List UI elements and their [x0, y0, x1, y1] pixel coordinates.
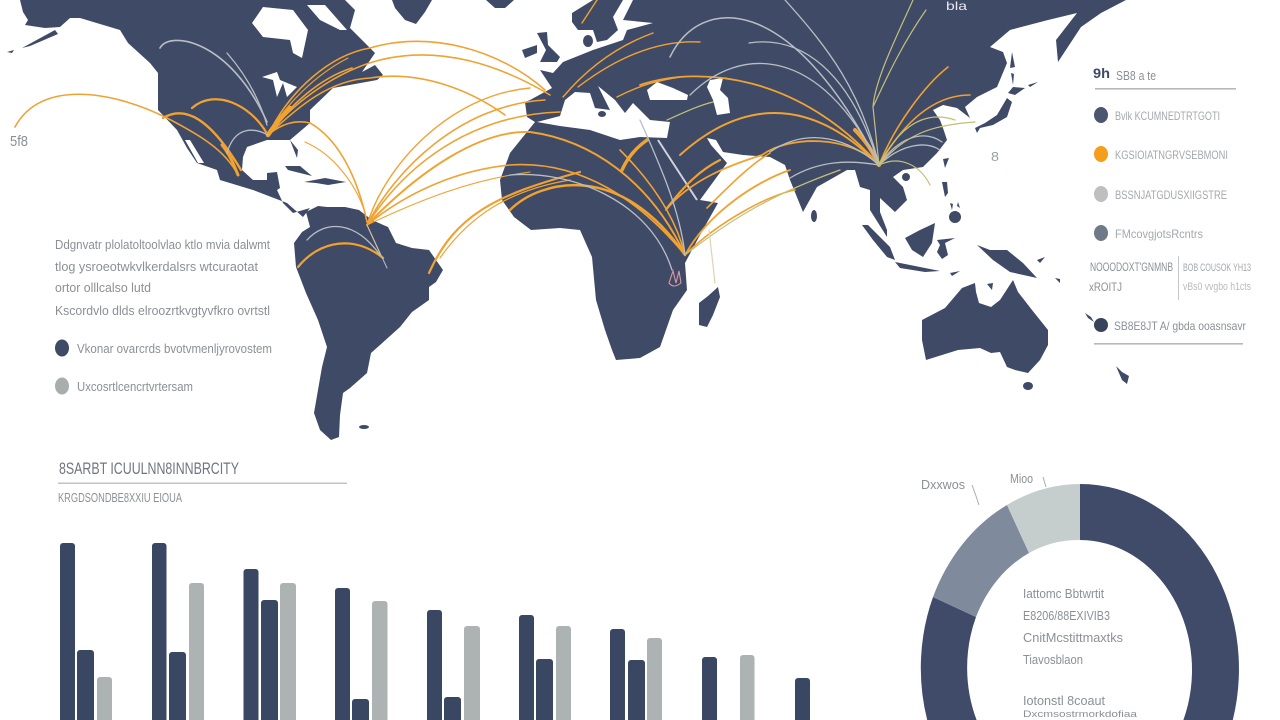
Philippines [942, 182, 961, 223]
Madagascar [699, 287, 720, 327]
bar group 5 [427, 610, 480, 720]
note block [1089, 256, 1251, 300]
legend row slate [1094, 225, 1203, 241]
bar chart [60, 543, 810, 720]
note block: vBs0 vvgbo h1cts [1183, 281, 1251, 293]
bar group 3 [244, 569, 296, 720]
North America [20, 0, 383, 217]
description paragraph [55, 237, 270, 318]
legend row dark: Bvlk KCUMNEDTRTGOTI [1115, 109, 1220, 123]
Greenland [392, 0, 514, 24]
legend row dark [1094, 107, 1220, 123]
legend row total [1094, 318, 1246, 345]
Borneo [905, 223, 935, 257]
bar chart heading: KRGDSONDBE8XXIU EIOUA [58, 490, 182, 505]
Falkland islands [359, 425, 369, 429]
Black Sea [647, 82, 688, 100]
description paragraph: ortor olllcalso lutd [55, 280, 151, 295]
description paragraph: tlog ysroeotwkvlkerdalsrs wtcuraotat [55, 259, 258, 274]
Caribbean islands [285, 166, 346, 185]
Australia [922, 280, 1048, 373]
Aleutian islands [7, 30, 58, 53]
donut centre text: Iotonstl 8coaut [1023, 693, 1105, 708]
inland seas [537, 78, 730, 140]
donut centre text: Iattomc Bbtwrtit [1023, 586, 1104, 601]
grey routes [160, 0, 942, 270]
description paragraph: Kscordvlo dlds elroozrtkvgtyvfkro ovrtstl [55, 303, 270, 318]
bar group 1 [60, 543, 112, 720]
donut dark segment [921, 484, 1239, 720]
Red Sea and Sardinia [658, 140, 697, 200]
donut label left: Dxxwos [921, 477, 965, 492]
donut centre text: Tiavosblaon [1023, 652, 1083, 667]
donut centre text: E8206/88EXIVIB3 [1023, 608, 1110, 623]
Caspian Sea [707, 78, 730, 115]
donut label left [921, 477, 979, 505]
bar group 7 [610, 629, 662, 720]
legend title: 9h [1093, 65, 1110, 81]
Hainan and Taiwan [902, 158, 949, 181]
bar chart heading: 8SARBT ICUULNN8INNBRCITY [59, 459, 239, 478]
label: west edge marker: 5f8 [10, 133, 28, 150]
legend row orange: KGSIOIATNGRVSEBMONI [1115, 148, 1228, 162]
Japan and Sakhalin [975, 52, 1038, 133]
donut centre text [1023, 586, 1137, 719]
Sardinia [598, 111, 606, 117]
bar group 9 [795, 678, 810, 720]
panel: right legend [1089, 65, 1251, 345]
legend row orange [1094, 146, 1228, 162]
legend title: SB8 a te [1116, 68, 1156, 83]
label: pacific marker: 8 [991, 149, 999, 164]
Sri Lanka [811, 210, 817, 222]
donut centre text: CnitMcstittmaxtks [1023, 630, 1123, 645]
pink loop marker [669, 271, 681, 286]
New Guinea [977, 245, 1060, 283]
legend item grey [55, 378, 193, 394]
legend item grey: Uxcosrtlcencrtvrtersam [77, 379, 193, 394]
donut chart [921, 471, 1239, 720]
note block: NOOODOXT'GNMNB [1090, 260, 1173, 274]
donut light segment [1007, 484, 1080, 553]
Scandinavia [572, 0, 623, 42]
United Kingdom and Ireland [522, 32, 560, 62]
Mediterranean [537, 86, 670, 140]
olive routes [667, 0, 975, 283]
legend row light grey [1094, 186, 1227, 202]
bar group 6 [519, 615, 571, 720]
flight arcs [15, 0, 975, 286]
legend title [1093, 65, 1236, 90]
panel: left description and legend [55, 237, 272, 394]
Sumatra and Java [862, 225, 960, 276]
bar group 8 [702, 655, 754, 720]
donut centre text: Dxcmsostrmorkdofiaa [1023, 709, 1137, 719]
note block: xROITJ [1089, 280, 1122, 294]
bar group 4 [335, 588, 388, 720]
donut label top: Mioo [1010, 471, 1033, 486]
legend row slate: FMcovgjotsRcntrs [1115, 227, 1203, 241]
Africa and Eurasia [500, 0, 1126, 360]
Baja sliver [185, 140, 204, 163]
orange routes [15, 0, 970, 273]
donut mid segment [933, 505, 1029, 617]
bar group 2 [152, 543, 204, 720]
legend row total: SB8E8JT A/ gbda ooasnsavr [1114, 319, 1246, 333]
South America [294, 206, 443, 440]
description paragraph: Ddgnvatr plolatoltoolvlao ktlo mvia dalwmt [55, 237, 270, 252]
world map [7, 0, 1129, 440]
bar chart heading [58, 459, 347, 505]
Tasmania [1023, 382, 1033, 390]
legend item dark: Vkonar ovarcrds bvotvmenljyrovostem [77, 341, 272, 356]
Sulawesi [937, 238, 955, 259]
Danish isle [583, 35, 593, 47]
New Zealand [1085, 313, 1129, 384]
legend row light grey: BSSNJATGDUSXIIGSTRE [1115, 188, 1227, 202]
